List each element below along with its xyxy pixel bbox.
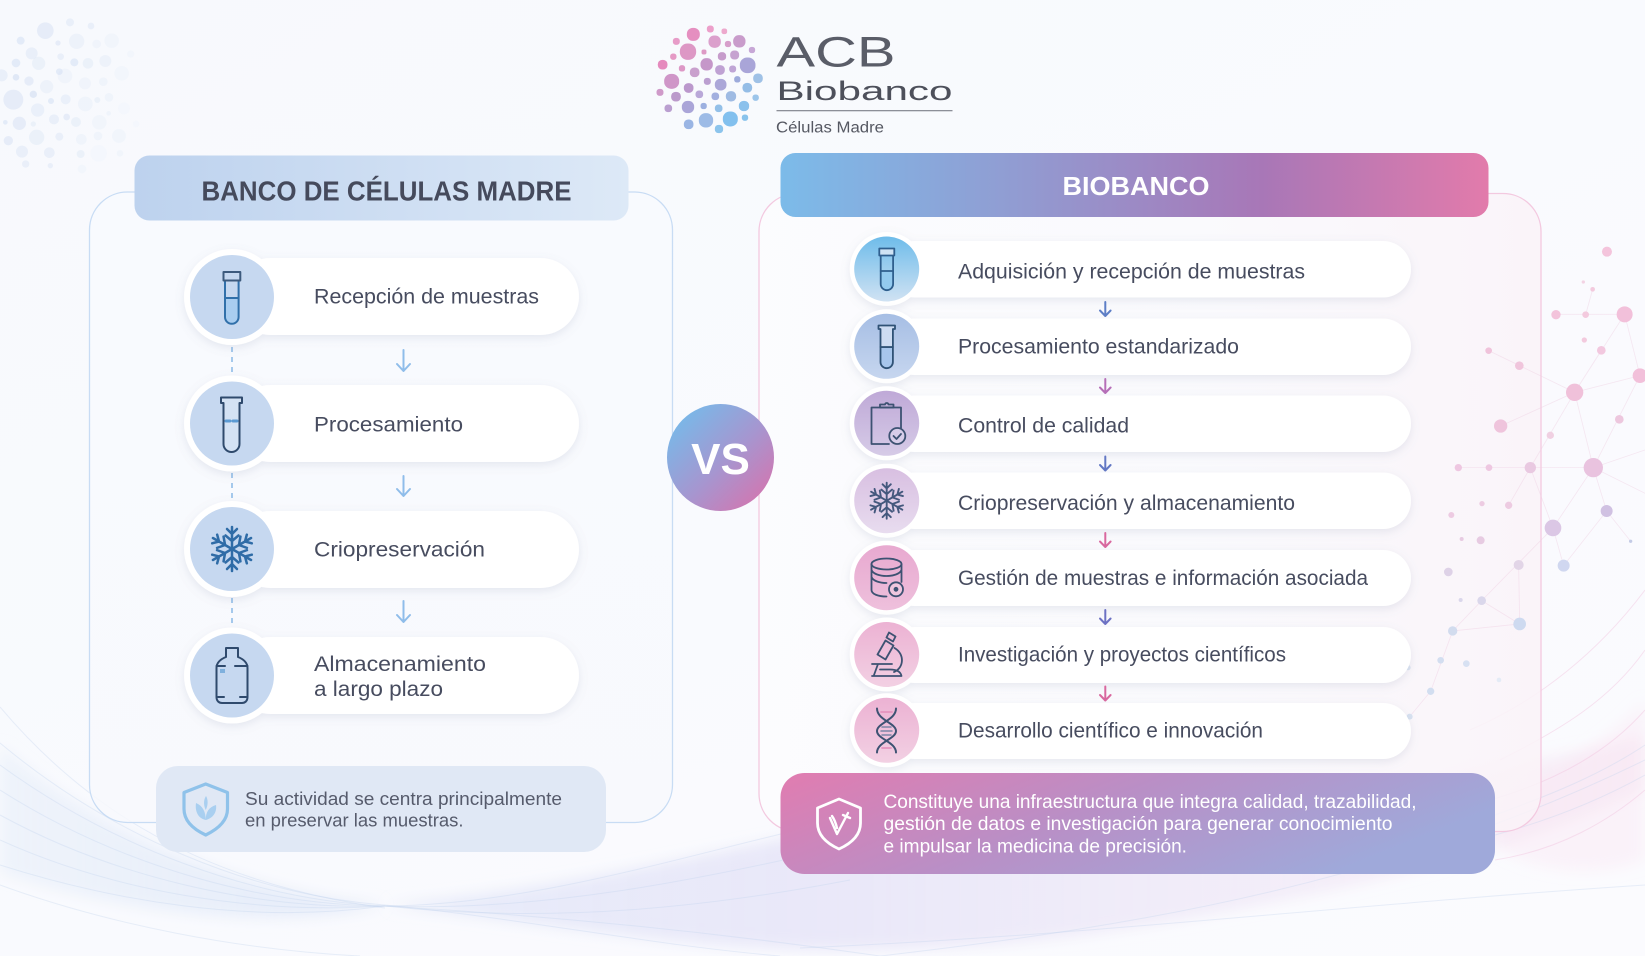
step: Desarrollo científico: [850, 693, 1411, 767]
callout: infrastructure: gestión de datos e investigación para generar conocimiento: [884, 814, 1392, 835]
step: Procesamiento: Procesamiento: [314, 414, 463, 437]
step: Procesamiento estandarizado: Procesamiento estandarizado: [958, 335, 1239, 358]
step: Control de calidad: Control de calidad: [958, 414, 1129, 437]
icon: microscope: [872, 632, 902, 676]
step: Gestión de muestras: [850, 541, 1411, 615]
step: Desarrollo científico: Desarrollo científico e innovación: [958, 720, 1263, 743]
arrow: [397, 476, 410, 496]
callout: preserve samples: en preservar las muestras.: [245, 811, 464, 831]
icon: shield with leaves: [184, 784, 228, 835]
step: Adquisición: [850, 232, 1411, 306]
VS badge: VS: [691, 435, 750, 484]
step: Recepción de muestras: Recepción de muestras: [314, 286, 539, 308]
step: Investigación: Investigación y proyectos científicos: [958, 644, 1286, 667]
arrow: [1100, 302, 1111, 316]
step: Criopreservación: [184, 501, 579, 597]
logo text Biobanco: Biobanco: [776, 76, 952, 106]
icon: snowflake: [210, 527, 254, 571]
icon: shield: [818, 799, 860, 849]
panel: biobanco: [780, 153, 1495, 874]
panel heading: BANCO DE CÉLULAS MADRE: [202, 176, 572, 206]
icon: database: [872, 558, 903, 596]
panel: banco de células madre: [90, 156, 672, 852]
dashed connectors: [231, 347, 233, 628]
logo mark: dot sphere: [657, 26, 762, 133]
step: Recepción de muestras: [184, 249, 579, 345]
icon: snowflake: [868, 483, 905, 519]
icon: cryogenic tank: [216, 648, 248, 703]
arrow: [1100, 686, 1111, 700]
arrow: [1100, 456, 1111, 470]
panel: biobanco frame: [759, 194, 1541, 832]
panel heading: [780, 153, 1488, 217]
step: Almacenamiento a largo plazo: a largo plazo: [314, 678, 443, 701]
step: Criopreservación y almacenamiento: [850, 464, 1411, 538]
logo subtitle: Células Madre: [776, 120, 884, 137]
panel heading: BIOBANCO: [1062, 171, 1210, 201]
logo rule: [776, 110, 952, 111]
callout: infrastructure: Constituye una infraestructura que integra calidad, trazabilidad,: [884, 792, 1416, 813]
logo text ACB: ACB: [776, 29, 896, 77]
arrow: [397, 350, 410, 371]
step: Control de calidad: [850, 386, 1411, 460]
arrow: [397, 601, 410, 622]
step: Procesamiento estandarizado: [850, 309, 1411, 383]
panel frame: [90, 192, 672, 822]
arrow: [1100, 379, 1111, 393]
callout: preserve samples: [156, 766, 606, 852]
step: Gestión de muestras: Gestión de muestras e información asociada: [958, 567, 1368, 590]
step: Almacenamiento a largo plazo: Almacenamiento: [314, 653, 486, 676]
decorative bubble cluster top left: [0, 18, 139, 173]
panel heading: [134, 156, 628, 220]
icon: clipboard check: [872, 403, 905, 444]
arrow: [1100, 610, 1111, 624]
step: Criopreservación y almacenamiento: Criopreservación y almacenamiento: [958, 492, 1295, 515]
logo: ACB Biobanco: [657, 26, 952, 137]
icon: test tube: [224, 272, 240, 324]
icon: centrifuge tube: [221, 398, 242, 452]
callout: preserve samples: Su actividad se centra principalmente: [245, 789, 562, 809]
background waves: [0, 590, 1645, 956]
step: Investigación: [850, 618, 1411, 692]
step: Criopreservación: Criopreservación: [314, 539, 485, 562]
callout: infrastructure: [780, 773, 1495, 874]
decorative molecular network right: [1405, 247, 1645, 720]
step: Adquisición: Adquisición y recepción de muestras: [958, 260, 1305, 283]
step: Almacenamiento a largo plazo: [184, 628, 579, 724]
callout: infrastructure: e impulsar la medicina de precisión.: [884, 836, 1187, 857]
icon: centrifuge tube: [878, 326, 895, 368]
icon: test tube: [879, 248, 894, 290]
step: Procesamiento: [184, 376, 579, 472]
arrow: [1100, 533, 1111, 547]
icon: DNA helix: [877, 708, 896, 752]
VS badge: [667, 404, 774, 511]
